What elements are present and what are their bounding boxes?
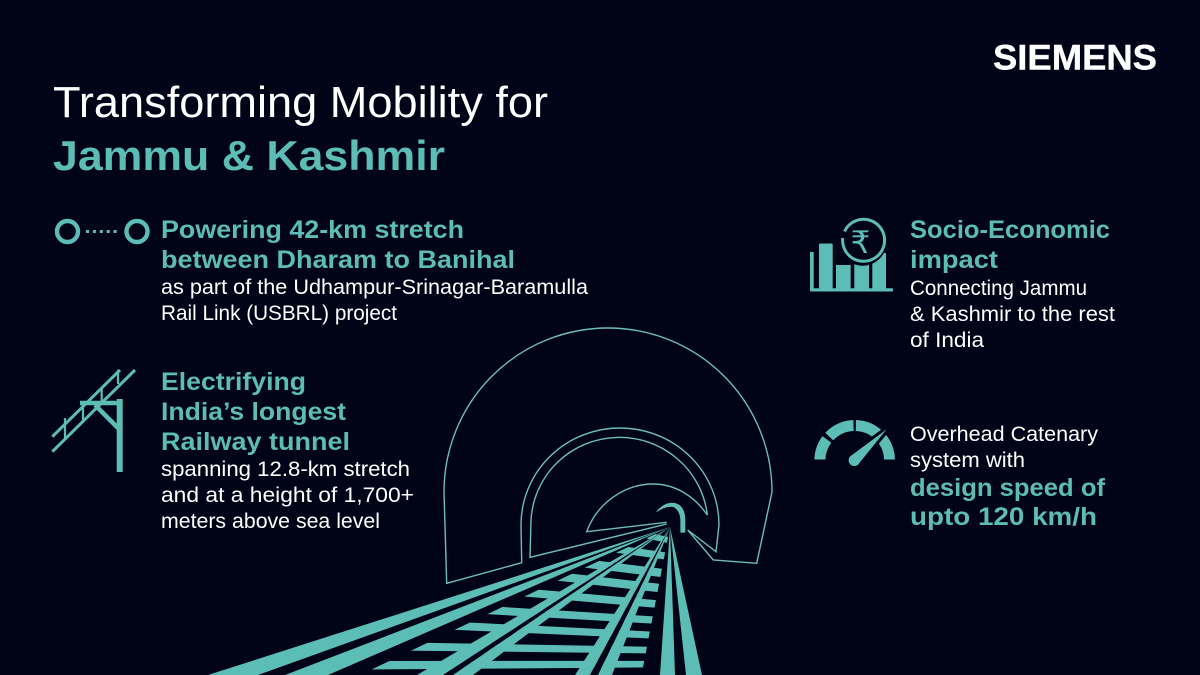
logo: Siemens: SIEMENS (993, 38, 1157, 78)
text block: socio-economic impact: Connecting Jammu (910, 277, 1087, 300)
text block: powering 42-km stretch (161, 216, 588, 325)
text block: electrifying tunnel: spanning 12.8-km stretch (161, 458, 410, 481)
illustration: tunnel arches (444, 328, 772, 583)
text block: powering 42-km stretch: Rail Link (USBRL) project (161, 302, 397, 325)
text block: electrifying tunnel: Electrifying (161, 368, 306, 396)
text block: socio-economic impact (910, 216, 1115, 352)
icon: route with two stations (57, 221, 148, 242)
icon: speedometer gauge (820, 426, 890, 466)
text block: socio-economic impact: Socio-Economic (910, 216, 1110, 244)
title: Jammu & Kashmir (53, 132, 445, 179)
sleepers (372, 534, 668, 670)
text block: design speed: upto 120 km/h (910, 503, 1097, 531)
rails (208, 527, 702, 675)
text block: electrifying tunnel: India’s longest (161, 398, 347, 426)
text block: design speed: design speed of (910, 474, 1106, 502)
text block: design speed (910, 423, 1106, 531)
text block: electrifying tunnel: Railway tunnel (161, 428, 350, 456)
text block: electrifying tunnel (161, 368, 414, 533)
text block: electrifying tunnel: meters above sea level (161, 510, 380, 533)
text block: powering 42-km stretch: as part of the Udhampur-Srinagar-Baramulla (161, 276, 588, 299)
text block: socio-economic impact: of India (910, 329, 984, 352)
text block: design speed: system with (910, 449, 1025, 472)
icon: bar chart with rupee coin: ₹ (851, 225, 870, 261)
illustration: railway track in perspective (208, 527, 702, 675)
text block: design speed: Overhead Catenary (910, 423, 1098, 446)
text block: electrifying tunnel: and at a height of 1,700+ (161, 484, 414, 507)
text block: powering 42-km stretch: between Dharam to Banihal (161, 246, 515, 274)
title (53, 78, 548, 179)
text block: socio-economic impact: impact (910, 246, 999, 274)
title: Transforming Mobility for (53, 78, 548, 127)
text block: powering 42-km stretch: Powering 42-km stretch (161, 216, 464, 244)
icon: overhead catenary mast (52, 370, 135, 472)
text block: socio-economic impact: & Kashmir to the rest (910, 303, 1115, 326)
icon: bar chart with rupee coin (810, 218, 893, 292)
